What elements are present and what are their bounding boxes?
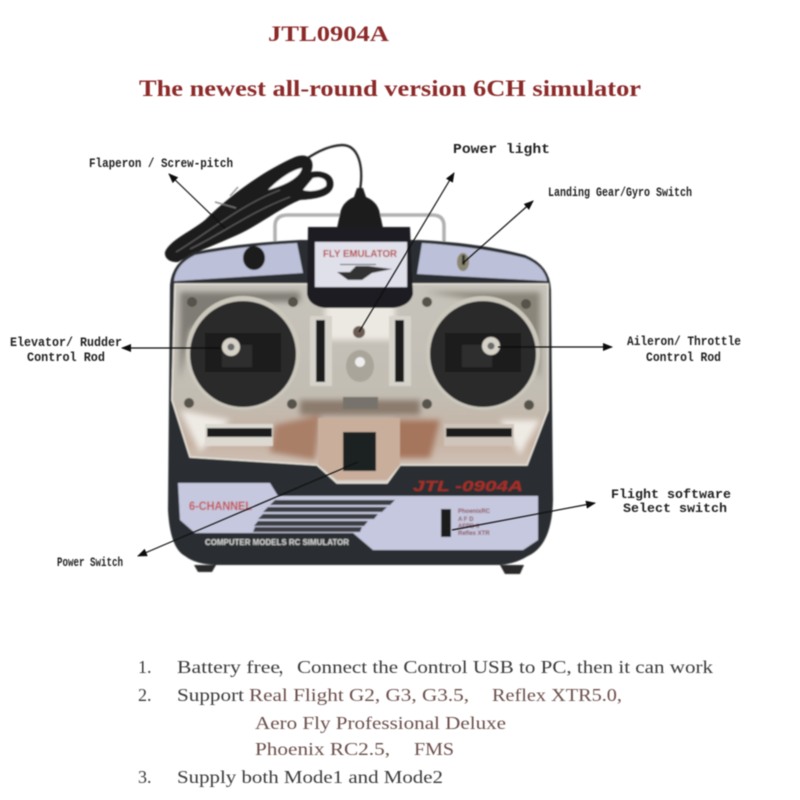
vertical trims [310,316,332,386]
centre module [307,227,413,308]
right stick gimbal [430,301,536,407]
lower blue plate [178,483,538,550]
JTL logo: JTL -0904A [413,478,523,495]
left stick gimbal [190,301,296,407]
transmitter photo illustration: FLY EMULATOR [323,249,398,260]
feature list: Connect the Control USB to PC, then it can work [297,657,713,677]
arrow: power light [359,173,454,332]
label: power light: Power light [453,142,550,158]
right stick knob [482,337,500,355]
item 1: 1. [138,657,152,677]
flaperon knob [243,246,265,270]
screws [184,297,534,410]
feature list: Support [177,685,244,705]
arrow: landing gear [463,201,533,263]
arrow: flaperon [169,174,225,228]
body [168,240,553,565]
feet [194,565,524,574]
feature list: FMS [414,739,454,759]
power light [353,326,365,338]
transmitter photo illustration [165,145,553,574]
horizontal trims [205,424,273,446]
gyro switch [457,253,469,271]
selector labels: Reflex XTR [458,531,490,537]
label: flight software: Flight software [611,487,731,502]
centre badge [346,350,374,382]
item 2: 2. [138,685,152,705]
arrow: aileron [498,346,612,348]
arrow: elevator [122,347,220,349]
chrome mottling [180,292,540,460]
callout labels: Control Rod [27,350,105,365]
left stick ring [186,296,300,410]
label: elevator: Elevator/ Rudder [10,335,122,350]
subtitle: The newest all-round version 6CH simulator [139,76,641,101]
feature list: ， [278,657,296,677]
feature list: Phoenix RC2.5, [255,739,390,759]
feature list: Reflex XTR5.0, [492,685,622,705]
feature list: Supply both Mode1 and Mode2 [177,767,443,787]
arrow: software select [452,503,595,530]
arrow: power switch [138,462,358,556]
chrome faceplate [172,284,548,483]
feature list: Real Flight G2, G3, G3.5, [249,685,469,705]
selector labels [458,509,491,537]
selector switch [441,509,451,537]
selector labels: PhoenixRC [458,509,491,515]
right stick ring [426,296,540,410]
selector labels: A F D [458,517,474,523]
item 3: 3. [138,767,152,787]
arrows [122,173,612,556]
label: flaperon: Flaperon / Screw-pitch [89,156,233,171]
helicopter icon [337,264,392,280]
6-channel label: 6-CHANNEL [189,499,252,513]
power switch [343,432,376,471]
power switch surround [318,418,400,480]
label: landing gear: Landing Gear/Gyro Switch [548,185,692,200]
title: JTL0904A [268,21,389,46]
feature list: Battery free [177,657,280,677]
stripes [253,500,395,532]
callout labels: Select switch [623,501,727,516]
model label: COMPUTER MODELS RC SIMULATOR [205,538,349,547]
cable bundle [165,145,361,262]
left blue band [174,243,303,281]
cable plug [337,188,383,228]
label: power switch: Power Switch [57,555,123,570]
label: aileron: Aileron/ Throttle [627,334,741,349]
right blue band [417,243,547,281]
selector labels: AFPD II [458,524,480,530]
module label [315,242,407,287]
carry handle [275,215,444,242]
callout labels [10,142,741,570]
callout labels: Control Rod [646,350,721,365]
left stick knob [222,338,240,356]
feature list: Aero Fly Professional Deluxe [255,713,506,733]
feature list [138,657,713,787]
